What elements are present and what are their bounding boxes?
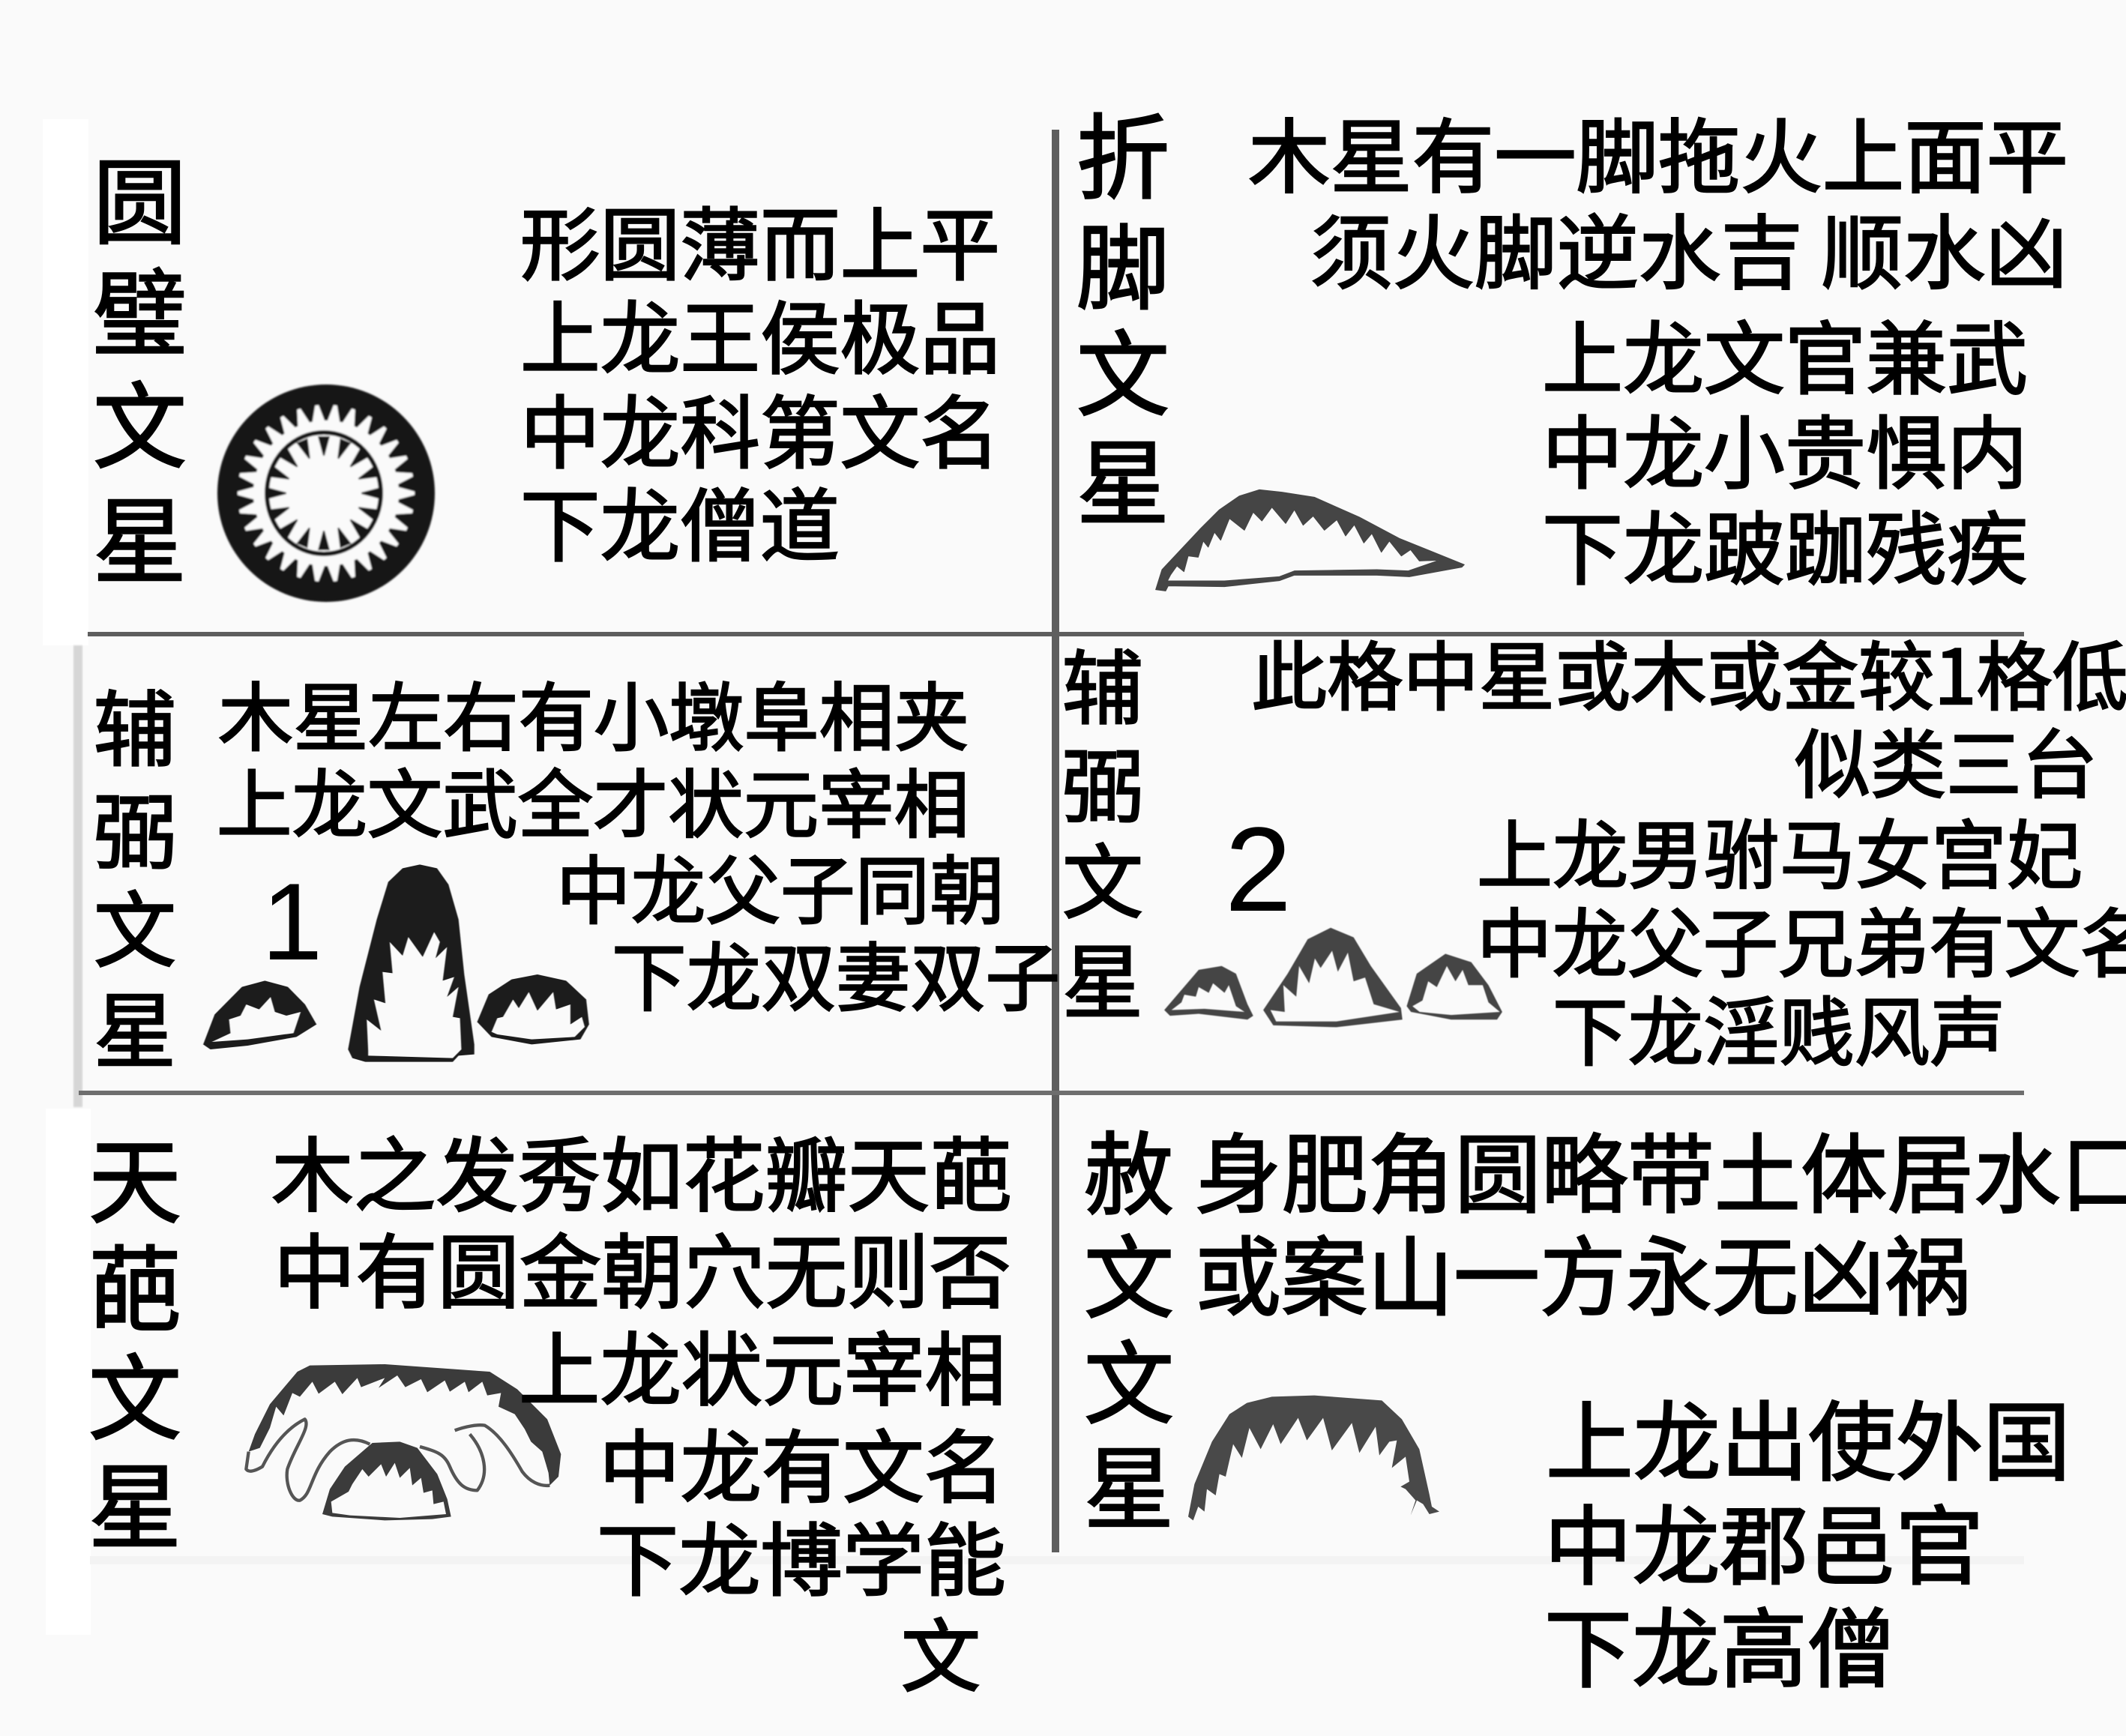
text block: 辅弼文星 2 description: 下龙淫贱风声: [1553, 972, 2005, 1081]
text block: 赦文文星 description: 上龙出使外国: [1546, 1374, 2071, 1498]
text block: 圆璧文星 description: 上龙王侯极品: [520, 275, 1000, 391]
heading: 辅弼文星: 弼: [1062, 723, 1143, 840]
heading: 折脚文星: [1076, 83, 1169, 543]
heading: 辅弼文星: 文: [1062, 819, 1143, 935]
heading: 天葩文星: 葩: [88, 1215, 181, 1350]
panel: 天葩文星: [88, 1107, 1012, 1708]
text block: 天葩文星 description: 木之发秀如花瓣天葩: [271, 1112, 1012, 1229]
heading: 赦文文星: 赦: [1084, 1103, 1174, 1233]
panel: 辅弼文星 1: [94, 658, 1060, 1085]
text block: 赦文文星 description: [1195, 1106, 2126, 1705]
heading: 赦文文星: [1084, 1103, 1174, 1547]
panel: 赦文文星: [1084, 1103, 2126, 1705]
heading: 辅弼文星: 星: [94, 965, 176, 1085]
text block: 赦文文星 description: 中龙郡邑官: [1544, 1478, 1984, 1603]
text block: 辅弼文星 2 description: 上龙男驸马女宫妃: [1477, 795, 2083, 904]
text block: 圆璧文星 description: 中龙科第文名: [520, 370, 1000, 485]
heading: 辅弼文星: [94, 663, 176, 1085]
heading: 赦文文星: 文: [1084, 1206, 1174, 1336]
heading: 赦文文星: 星: [1084, 1417, 1174, 1547]
heading: 折脚文星: 折: [1076, 83, 1169, 218]
text block: 赦文文星 description: 下龙高僧: [1544, 1581, 1895, 1705]
panel: 折脚文星: [1076, 83, 2068, 601]
heading: 赦文文星: 文: [1084, 1312, 1174, 1442]
heading: 圆璧文星: 文: [93, 352, 187, 487]
number 2: 2: [1225, 802, 1292, 936]
text block: 辅弼文星 1 description: 上龙文武全才状元宰相: [217, 745, 969, 853]
heading: 圆璧文星: 圆: [93, 127, 187, 263]
text block: 辅弼文星 2 description: [1251, 617, 2126, 1081]
text block: 赦文文星 description: 身肥角圆略带土体居水口: [1195, 1106, 2126, 1231]
panel: 辅弼文星 2: [1062, 617, 2126, 1081]
heading: 天葩文星: 星: [88, 1432, 181, 1567]
text block: 天葩文星 description: 上龙状元宰相: [519, 1306, 1006, 1422]
text block: 圆璧文星 description: 下龙僧道: [520, 462, 840, 578]
heading: 折脚文星: 脚: [1076, 193, 1169, 328]
text block: 天葩文星 description: [271, 1112, 1012, 1708]
heading: 天葩文星: 天: [88, 1107, 181, 1242]
text block: 圆璧文星 description: [520, 181, 1000, 578]
text block: 折脚文星 description: 木星有一脚拖火上面平: [1248, 93, 2068, 210]
icon: 赦文 mountain: [1188, 1396, 1439, 1520]
text block: 天葩文星 description: 下龙博学能: [597, 1497, 1006, 1612]
text block: 辅弼文星 2 description: 此格中星或木或金较1格低: [1251, 617, 2126, 726]
icon: 天葩 mountain: [246, 1364, 561, 1520]
heading: 辅弼文星: 弼: [94, 766, 176, 886]
text block: 天葩文星 description: 文: [901, 1593, 981, 1708]
text block: 折脚文星 description: 下龙跛跏残疾: [1542, 486, 2028, 601]
heading: 辅弼文星: [1062, 624, 1143, 1035]
text block: 辅弼文星 1 description: 木星左右有小墩阜相夹: [218, 658, 969, 766]
text block: 辅弼文星 1 description: 中龙父子同朝: [556, 831, 1005, 939]
text block: 辅弼文星 2 description: 似类三台: [1795, 705, 2098, 813]
icon: three mounds 2: [1164, 928, 1502, 1027]
heading: 圆璧文星: [93, 127, 187, 602]
heading: 辅弼文星: 辅: [94, 663, 176, 783]
text block: 天葩文星 description: 中龙有文名: [599, 1404, 1005, 1519]
heading: 天葩文星: [88, 1107, 181, 1567]
text block: 折脚文星 description: 上龙文官兼武: [1542, 295, 2028, 411]
heading: 圆璧文星: 璧: [93, 238, 187, 374]
heading: 折脚文星: 星: [1076, 409, 1169, 543]
heading: 圆璧文星: 星: [93, 466, 187, 602]
text block: 辅弼文星 1 description: 下龙双妻双子: [612, 918, 1060, 1026]
heading: 折脚文星: 文: [1076, 300, 1169, 435]
text block: 赦文文星 description: 或案山一方永无凶祸: [1195, 1209, 1971, 1333]
text block: 辅弼文星 1 description: [217, 658, 1060, 1026]
icon: three mounds 1: [203, 864, 589, 1062]
panel: 圆璧文星: [93, 127, 1000, 602]
text block: 圆璧文星 description: 形圆薄而上平: [520, 181, 1000, 297]
icon: 折脚 mountain: [1156, 489, 1464, 591]
text block: 天葩文星 description: 中有圆金朝穴无则否: [274, 1208, 1011, 1325]
text block: 折脚文星 description: 须火脚逆水吉 顺水凶: [1310, 189, 2068, 306]
text block: 折脚文星 description: 中龙小贵惧内: [1542, 390, 2028, 505]
heading: 辅弼文星: 星: [1062, 918, 1143, 1035]
text block: 折脚文星 description: [1248, 93, 2068, 601]
heading: 天葩文星: 文: [88, 1324, 181, 1459]
heading: 辅弼文星: 文: [94, 864, 176, 984]
number 1: 1: [262, 861, 322, 983]
heading: 辅弼文星: 辅: [1062, 624, 1143, 741]
icon: ring star: [217, 385, 435, 602]
